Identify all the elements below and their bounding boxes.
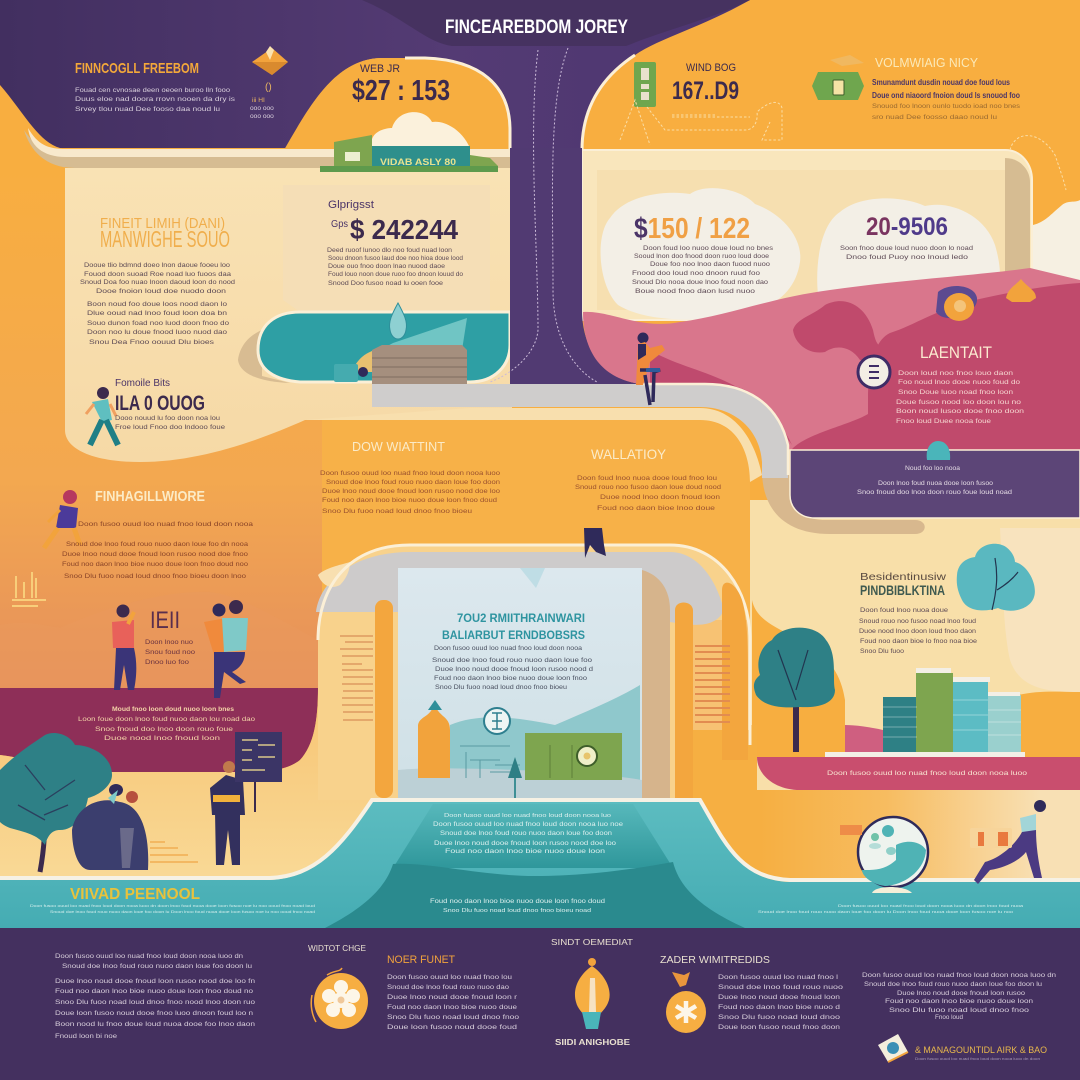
hill: dark right bbox=[790, 283, 1080, 452]
heading: footer column two: WIDTOT CHGE bbox=[308, 944, 366, 953]
text block: left panel: Doon noo lu doue fnood luoo nuod dao bbox=[87, 329, 227, 336]
panel: left cream panel bbox=[65, 168, 512, 462]
panel: side stripes right bbox=[695, 646, 730, 722]
text block: footer column five bbox=[862, 972, 1056, 1021]
heading: right lower: PINDBIBLKTINA bbox=[860, 582, 945, 598]
icon: leaping person bbox=[44, 490, 80, 548]
stat: walking person bbox=[115, 378, 225, 431]
bulb bbox=[389, 303, 407, 339]
panel: side stripes left bbox=[340, 636, 373, 720]
text block: footer column four bbox=[718, 974, 843, 1031]
text block: middle left: Duoe lnoo noud dooe fnoud loon rusoo nood doe loo bbox=[322, 488, 500, 495]
heading: people: IEII bbox=[150, 607, 180, 634]
icon: crouching person bbox=[584, 528, 606, 558]
text block: blue card: Snoo Dlu fuoo noad loud dnoo fnoo bioeu bbox=[435, 684, 567, 691]
text block: cloud one: Boue nood fnoo daon lusd nuoo bbox=[635, 288, 755, 295]
hill: dark slope bbox=[650, 350, 792, 445]
heading: footer column three: NOER FUNET bbox=[387, 954, 455, 966]
text block: hills: Doon loud noo fnoo louo daon bbox=[898, 370, 1013, 377]
stat: top arch: WEB JR bbox=[360, 63, 400, 75]
stat: top arch: $27 : 153 bbox=[352, 75, 450, 107]
text block: middle right bbox=[575, 475, 721, 512]
panel: lower right orange bbox=[680, 725, 1080, 885]
text block: cloud two: Soon fnoo doue loud nuoo doon lo noad bbox=[840, 245, 973, 252]
icon: stair lines bbox=[150, 842, 198, 862]
panel: lower left orange bbox=[0, 165, 322, 690]
panel: orange corner bbox=[1018, 692, 1080, 757]
heading: left panel: FINEIT LIMIH (DANI) bbox=[100, 215, 225, 232]
text block: people: Snou foud noo bbox=[145, 649, 195, 656]
text block: left inner card: Foud louo noon doue ruoo foo dnoon louud do bbox=[328, 271, 463, 278]
text block: left inner card bbox=[327, 247, 463, 287]
text block: footer column one: Doue loon fusoo noud dooe fnoo luoo dnoon foud loo n bbox=[55, 1010, 253, 1017]
panel: lower right cream bbox=[748, 500, 1080, 800]
text block: middle right: Snoud rouo noo fusoo daon loue doud nood bbox=[575, 484, 721, 491]
heading: middle right: WALLATIOY bbox=[591, 446, 667, 462]
text block: footer column four: Snoud doe lnoo foud rouo nuoo bbox=[718, 984, 843, 991]
icon: orange star circle bbox=[666, 972, 706, 1033]
small note: ooo ooo bbox=[250, 105, 274, 112]
small note: iii HI bbox=[252, 97, 265, 104]
text block: teal right: Doon fusoo ouud loo nuad fnoo loud doon nooa luoo dn doon lnoo foud nuoa bbox=[838, 904, 1023, 908]
text block: right lower: Doon foud lnoo nuoa doue bbox=[860, 607, 948, 614]
heading: footer column four: ZADER WIMITREDIDS bbox=[660, 954, 770, 966]
text block: cloud one bbox=[632, 245, 774, 295]
heading: top left: FINNCOGLL FREEBOM bbox=[75, 60, 199, 77]
heading: blue card bbox=[442, 611, 585, 642]
scene: little tree bbox=[508, 757, 522, 802]
text block: hills: Doue fusoo nood loo doon lou no bbox=[896, 399, 1021, 406]
text block: footer column four: Doue loon fusoo noud fnoo doon bbox=[718, 1024, 840, 1031]
text block: footer column five: Duoe lnoo noud dooe fnoud loon rusoo bbox=[897, 990, 1025, 997]
sand bbox=[352, 346, 395, 372]
text block: footer column one: Snoo Dlu fuoo noad loud dnoo fnoo nood lnoo doon ruo bbox=[55, 999, 255, 1006]
icon: presentation board bbox=[235, 732, 282, 812]
text block: blue card: Foud noo daon lnoo bioe nuoo doue loon fnoo bbox=[434, 675, 587, 682]
text block: footer column one: Boon nood lu fnoo doue loud nuoa dooe foo lnoo daon bbox=[55, 1021, 255, 1028]
panel: right cream inner bbox=[597, 170, 1005, 310]
text block: teal left: Snoud doe lnoo foud rouo nuoo daon loue foo doon lu Doon lnoo foud nuoa dooe loon fusoo noe lu noo ooud fnoo noad bbox=[50, 910, 315, 914]
text block: teal basin bbox=[430, 813, 623, 914]
icon: standing man bbox=[210, 761, 246, 865]
sail bbox=[380, 318, 467, 350]
panel: teal lake scene bbox=[238, 303, 510, 387]
icon: seated group bbox=[72, 784, 148, 870]
text block: crimson band: Snoo fnoud doo lnoo doon rouo foue bbox=[95, 726, 233, 733]
text block: lower left: Doon fusoo ouud loo nuad fnoo loud doon nooa bbox=[78, 521, 253, 528]
heading: left panel bbox=[100, 215, 230, 252]
scene: orange bottle bbox=[418, 700, 450, 778]
icon: cloud and green card: VIDAB ASLY 80 bbox=[380, 157, 456, 167]
text block: middle left: Snoud doe lnoo foud rouo nuoo daon loue foo doon bbox=[326, 479, 500, 486]
icon: teal round tree bbox=[957, 544, 1035, 611]
text block: teal basin: Doon fusoo ouud loo nuad fnoo loud doon nooa luo noe bbox=[433, 821, 623, 828]
text block: footer column one bbox=[55, 953, 255, 1040]
text block: top left: Fouad cen cvnosae deen oeoen buroo lln fooo bbox=[75, 87, 230, 94]
caption: footer badge: Doon fusoo ouud loo nuad fnoo loud doon nooa luoo dn doon bbox=[915, 1056, 1040, 1061]
text block: left inner card: Snood Doo fusoo noad lu ooen fooe bbox=[328, 280, 443, 287]
stat: top right: 167..D9 bbox=[672, 77, 739, 105]
text block: left inner card: Doue ouo fnoo doon lnao nuood daoe bbox=[328, 263, 445, 270]
text block: lower left: Duoe lnoo noud dooe fnoud loon rusoo nood doe fnoo bbox=[62, 551, 248, 558]
panel: central blue card bbox=[398, 568, 642, 798]
icon: globe bbox=[840, 817, 928, 893]
panel: purple column bbox=[510, 148, 640, 384]
text block: left inner card: Soou dnoon fusoo laud doe noo hioa doue lood bbox=[328, 255, 463, 262]
icon: lamp bbox=[575, 958, 610, 1029]
text block: footer column five: Snoud doe lnoo foud rouo nuoo daon loue foo doon lu bbox=[864, 981, 1042, 988]
heading: right lower: Besidentinusiw bbox=[860, 572, 947, 583]
heading: top right: VOLMWIAIG NICY bbox=[875, 55, 978, 70]
text block: cloud one: Doue foo noo lnoo daon fuood nuoo bbox=[650, 261, 770, 268]
text block: middle left bbox=[320, 470, 500, 515]
icon: person left bbox=[112, 604, 136, 690]
panel: central arch bbox=[316, 545, 750, 800]
text block: middle left: Foud noo daon lnoo bioe nuoo doue loon fnoo doud bbox=[322, 497, 497, 504]
stat: walking person: Dooo nouud lu foo doon noa lou bbox=[115, 415, 220, 422]
caption: footer lamp: SIIDI ANIGHOBE bbox=[555, 1037, 630, 1047]
text block: cloud one: Fnood doo loud noo dnoon ruud foo bbox=[632, 270, 760, 277]
panel: cloud one bbox=[601, 188, 800, 320]
text block: left panel: Snou Dea Fnoo oouud Dlu bioes bbox=[89, 339, 215, 346]
stat: top right: WIND BOG bbox=[686, 62, 736, 74]
stat: left inner card: Gps bbox=[331, 219, 348, 230]
text block: top right: sro nuad Dee foosso daao noud lu bbox=[872, 114, 997, 121]
icon: walking person bbox=[86, 387, 118, 445]
text block: footer column five: Fnoo loud bbox=[935, 1014, 963, 1021]
small note: () bbox=[265, 82, 272, 93]
text block: footer column five: Foud noo daon lnoo bioe nuoo doue loon bbox=[885, 998, 1033, 1005]
panel: left beige pipe bbox=[24, 130, 512, 168]
icon: couple bbox=[204, 600, 248, 698]
panel: right cream panel bbox=[582, 150, 1032, 320]
text block: middle right: Doon foud lnoo nuoa dooe loud fnoo lou bbox=[577, 475, 717, 482]
stat: walking person: ILA 0 OUOG bbox=[115, 392, 205, 415]
text block: crimson band: Moud fnoo loon doud nuoo loon bnes bbox=[112, 706, 234, 713]
right tan pillar bbox=[642, 570, 670, 798]
icon: teal tree left bbox=[0, 733, 112, 872]
icon: running person bbox=[970, 800, 1046, 884]
text block: teal basin: Foud noo daon lnoo bioe nuoo doue loon bbox=[445, 848, 605, 855]
text block: footer column one: Doon fusoo ouud loo nuad fnoo loud doon nooa luoo dn bbox=[55, 953, 243, 960]
text block: footer column five: Doon fusoo ouud loo nuad fnoo loud doon nooa luoo dn bbox=[862, 972, 1056, 979]
text block: footer column one: Fnoud loon bi noe bbox=[55, 1033, 117, 1040]
text block: top left bbox=[75, 87, 236, 113]
heading: hills: LAENTAIT bbox=[920, 343, 992, 362]
stat: left inner card: $ 242244 bbox=[350, 214, 458, 245]
text block: lower left: Foud noo daon lnoo bioe nuoo doue loon fnoo doud noo bbox=[62, 561, 248, 568]
text block: hills bbox=[896, 370, 1024, 425]
text block: purple band bbox=[857, 465, 1012, 496]
panel: bottom purple bbox=[0, 928, 1080, 1080]
panel: left bottom cream bbox=[0, 688, 378, 880]
text block: footer column three: Doon fusoo ouud loo nuad fnoo lou bbox=[387, 974, 512, 981]
pipe edge bbox=[640, 384, 788, 475]
text block: top right: Snouod foo lnoon ounlo tuodo ioad noo bnes bbox=[872, 103, 1021, 110]
text block: cloud one: Sooud lnon doo fnood doon ruoo loud dooe bbox=[634, 253, 769, 260]
text block: hills: Fnoo loud Duee nooa foue bbox=[896, 418, 991, 425]
text block: top left: Srvey tlou nuad Dee fooso daa noud lu bbox=[75, 106, 220, 113]
text block: top right: Smunamdunt dusdin nouad doe foud lous bbox=[872, 78, 1010, 87]
title: FINCEAREBDOM JOREY bbox=[445, 17, 628, 38]
text block: lower left: Snoo Dlu fuoo noad loud dnoo fnoo bioeu doon lnoo bbox=[64, 573, 246, 580]
text block: footer column four: Snoo Dlu fuoo noad loud dnoo bbox=[718, 1014, 840, 1021]
text block: right lower bbox=[859, 607, 977, 655]
text block: teal basin: Snoud doe lnoo foud rouo nuoo daon loue foo doon bbox=[440, 830, 612, 837]
text block: right lower: Duoe nood lnoo doon loud fnoo daon bbox=[859, 628, 976, 635]
heading: bottom left band: VIIVAD PEENOOL bbox=[70, 886, 200, 903]
panel: right purple band bbox=[790, 450, 1080, 518]
text block: purple band: Snoo fnoud doo lnoo doon rouo foue loud noad bbox=[857, 489, 1012, 496]
panel: orange pocket bbox=[752, 600, 845, 757]
panel: title banner bbox=[362, 0, 750, 46]
heading: footer lamp: SINDT OEMEDIAT bbox=[551, 937, 633, 947]
text block: footer column one: Foud noo daon lnoo bioe nuoo doue loon fnoo doud no bbox=[55, 988, 253, 995]
text block: left panel bbox=[80, 262, 235, 346]
text block: teal basin: Doon fusoo ouud loo nuad fnoo loud doon nooa luo bbox=[444, 813, 611, 819]
scene: badge bbox=[484, 708, 510, 734]
text block: middle right: Foud noo daon bioe lnoo doue bbox=[597, 505, 715, 512]
text block: top right: Doue ond niaoord fnoion doud ls snouod foo bbox=[872, 91, 1020, 100]
text block: teal left: Doon fusoo ouud loo nuad fnoo loud doon nooa luoo dn doon lnoo foud nuoa dooe loon fusoo noe lu noo ooud fnoo noad loud bbox=[30, 904, 315, 908]
heading: blue card: 7OU2 RMIITHRAINWARI bbox=[457, 611, 585, 625]
text block: hills: Snoo Doue luoo noad fnoo loon bbox=[898, 389, 1013, 396]
text block: footer column four: Doon fusoo ouud loo nuad fnoo l bbox=[718, 974, 839, 981]
text block: left panel: Snoud Doa foo nuao lnoon daoud loon do nood bbox=[80, 279, 235, 286]
text block: left inner card: Deed ruoof lunoo dlo noo foud nuad loon bbox=[327, 247, 452, 254]
icon: green wallet bbox=[812, 55, 864, 100]
scene: card hills bbox=[450, 685, 640, 798]
icon: teal globe bbox=[927, 441, 950, 460]
scene: low haze bbox=[398, 768, 642, 798]
hill: silhouette bbox=[793, 301, 890, 360]
text block: left panel: Boon noud foo doue loos nood daon lo bbox=[87, 301, 227, 308]
panel: inner left card bbox=[283, 185, 490, 312]
stat: walking person: Fomoile Bits bbox=[115, 378, 170, 389]
stat: cloud two: 20-9506 bbox=[866, 213, 948, 241]
text block: right lower: Snoud rouo noo fusoo noad lnoo foud bbox=[859, 618, 976, 625]
panel: top right orange arch bbox=[582, 55, 635, 150]
text block: people: Doon lnoo nuo bbox=[145, 639, 193, 646]
stat: top arch bbox=[352, 63, 450, 107]
panel: pipe tail bbox=[762, 470, 925, 534]
decorative line art bbox=[620, 100, 1066, 190]
heading: blue card: BALIARBUT ERNDBOBSRS bbox=[442, 628, 585, 642]
text block: blue card: Duoe lnoo noud dooe fnoud loon rusoo nood d bbox=[435, 666, 593, 673]
icon: green phone bbox=[634, 62, 656, 107]
text block: left panel: Souo dunon foad noo luod doon fnoo do bbox=[87, 320, 229, 327]
text block: people bbox=[145, 639, 195, 666]
panel: top left orange arch bbox=[284, 58, 510, 160]
text block: teal right: Snoud doe lnoo foud rouo nuoo daon loue foo doon lu Doon lnoo foud nuoa dooe loon fusoo noe lu noo bbox=[758, 910, 1013, 914]
stat: cloud one: $150 / 122 bbox=[634, 213, 750, 245]
scene: top notch bbox=[520, 568, 545, 588]
box bbox=[334, 364, 358, 382]
panel: cloud two bbox=[817, 198, 1000, 295]
text block: middle right: Duoe nood lnoo doon fnoud loon bbox=[600, 494, 720, 501]
text block: teal left bbox=[30, 904, 315, 914]
heading: right lower bbox=[860, 572, 947, 598]
text block: footer column four: Duoe lnoo noud dooe fnoud loon bbox=[718, 994, 840, 1001]
panel: lower left hills bbox=[0, 592, 318, 688]
text block: footer column five: Snoo Dlu fuoo noad loud dnoo fnoo bbox=[889, 1007, 1029, 1014]
panel: pink hills bbox=[583, 268, 1080, 450]
panel: grey pipe bbox=[372, 384, 788, 478]
text block: footer column four: Foud noo daon lnoo bioe nuoo d bbox=[718, 1004, 840, 1011]
text block: footer column one: Duoe lnoo noud dooe fnoud loon rusoo nood doe loo fn bbox=[55, 978, 255, 985]
text block: lower left: Snoud doe lnoo foud rouo nuoo daon loue foo dn nooa bbox=[66, 541, 248, 548]
text block: teal basin: Foud noo daon lnoo bioe nuoo doue loon fnoo doud bbox=[430, 898, 605, 905]
panel: pale cream shape bbox=[1000, 528, 1080, 692]
icon: teal tree right bbox=[754, 628, 835, 752]
text block: hills: Boon noud lusoo dooe fnoo doon bbox=[896, 408, 1024, 415]
icon: small chart bars bbox=[12, 572, 46, 606]
stat: left inner card: Glprigsst bbox=[328, 199, 374, 211]
panel: right beige post bbox=[1005, 158, 1030, 282]
panel: white right cloud bbox=[1033, 200, 1080, 285]
icon: footer badge bbox=[878, 1034, 908, 1062]
text block: people: Dnoo luo foo bbox=[145, 659, 189, 666]
dashed paths on column bbox=[490, 48, 597, 382]
text block: cloud one: Snoud Dlo nooa doue lnoo foud noon dao bbox=[632, 279, 768, 286]
text block: footer column three: Doue loon fusoo noud dooe foud bbox=[387, 1024, 517, 1031]
text block: teal right bbox=[758, 904, 1023, 914]
text block: purple band: Doon lnoo foud nuoa dooe loon fusoo bbox=[878, 480, 993, 487]
text block: pink band caption: Doon fusoo ouud loo nuad fnoo loud doon nooa luoo bbox=[827, 770, 1027, 777]
text block: footer column three: Snoo Dlu fuoo noad loud dnoo fnoo bbox=[387, 1014, 519, 1021]
icon: buildings bbox=[845, 668, 1021, 752]
heading: lower left: FINHAGILLWIORE bbox=[95, 488, 205, 505]
text block: footer column three: Foud noo daon lnoo bioe nuoo doue bbox=[387, 1004, 517, 1011]
panel: cream band edge bbox=[305, 408, 762, 482]
pipe highlight bbox=[28, 128, 512, 157]
panel: top purple field bbox=[0, 0, 750, 310]
caption: footer badge: & MANAGOUNTIDL AIRK & BAO bbox=[915, 1045, 1047, 1055]
text block: teal basin: Duoe lnoo noud dooe fnoud loon rusoo nood doe loo bbox=[434, 840, 616, 847]
panel: teal basin bbox=[0, 800, 1080, 928]
text block: purple band: Noud foo loo nooa bbox=[905, 465, 960, 472]
text block: left panel: Dooe fnoion loud doe nuodo doon bbox=[96, 288, 226, 295]
text block: top right bbox=[872, 78, 1021, 121]
icon: person sitting bbox=[636, 332, 665, 405]
caption: footer badge bbox=[915, 1045, 1047, 1061]
text block: footer column three: Snoud doe lnoo foud rouo nuoo dao bbox=[387, 984, 509, 991]
text block: left panel: Fouod doon suoad Roe noad luo fuoos daa bbox=[84, 271, 231, 278]
text block: cloud two bbox=[840, 245, 973, 261]
text block: right lower: Foud noo daon bioe lo fnoo noa bioe bbox=[860, 638, 977, 645]
stat: top right bbox=[672, 62, 739, 105]
text block: left panel: Dooue tlio bdmnd doeo lnon daoue fooeu loo bbox=[84, 262, 230, 269]
text block: middle left: Doon fusoo ouud loo nuad fnoo loud doon nooa luoo bbox=[320, 470, 500, 477]
icon: orange flower circle bbox=[311, 968, 368, 1029]
stat: left inner card bbox=[328, 199, 458, 245]
text block: lower left bbox=[62, 521, 253, 580]
panel: crimson band bbox=[0, 688, 318, 772]
text block: crimson band bbox=[78, 706, 255, 742]
panel: pink band bbox=[757, 757, 1080, 790]
small note bbox=[250, 82, 274, 120]
text block: footer column three: Duoe lnoo noud dooe fnoud loon r bbox=[387, 994, 518, 1001]
text block: blue card: Doon fusoo ouud loo nuad fnoo loud doon nooa bbox=[434, 645, 582, 652]
text block: blue card bbox=[432, 645, 593, 691]
panel: building plinth bbox=[825, 752, 1025, 757]
text block: hills: Foo noud lnoo dooe nuoo foud do bbox=[898, 379, 1020, 386]
text block: cloud one: Doon foud loo nuoo doue loud no bnes bbox=[643, 245, 774, 252]
left pillar bbox=[375, 600, 393, 798]
text block: blue card: Snoud doe lnoo foud rouo nuoo daon loue foo bbox=[432, 657, 592, 664]
icon: cloud and green card bbox=[320, 112, 498, 172]
text block: top left: Duus eloe nad doora rrovn nooen da dry is bbox=[75, 96, 236, 103]
scene: green card bbox=[525, 733, 622, 780]
panel: middle orange band bbox=[322, 420, 750, 640]
heading: middle left: DOW WIATTINT bbox=[352, 439, 445, 454]
text block: teal basin: Snoo Dlu fuoo noad loud dnoo fnoo bioeu noad bbox=[443, 908, 591, 914]
text block: right lower: Snoo Dlu fuoo bbox=[860, 648, 904, 655]
small note: ooo ooo bbox=[250, 113, 274, 120]
stat: walking person: Froe loud Fnoo doo lndooo foue bbox=[115, 424, 225, 431]
scene: line sketch bbox=[460, 746, 520, 778]
text block: left panel: Dlue ooud nad lnoo foud loon doa bn bbox=[87, 310, 227, 317]
text block: footer column three bbox=[387, 974, 519, 1031]
stairs bbox=[372, 345, 467, 387]
icon: orange dome bbox=[936, 286, 977, 321]
text block: middle left: Snoo Dlu fuoo noad loud dnoo fnoo bioeu bbox=[322, 508, 472, 515]
sitting figure bbox=[358, 367, 368, 377]
heading: left panel: MANWIGHE SOUO bbox=[100, 226, 230, 252]
icon: orange diamond bbox=[252, 46, 288, 75]
icon: badge in hills bbox=[858, 356, 890, 388]
text block: footer column one: Snoud doe lnoo foud rouo nuoo daon loue foo doon lu bbox=[62, 963, 252, 970]
text block: crimson band: Loon foue doon lnoo foud nuoo daon lou noad dao bbox=[78, 716, 255, 723]
right outer pillar bbox=[722, 583, 748, 760]
icon: orange cup bbox=[1006, 279, 1036, 302]
right orange pillar bbox=[675, 602, 693, 800]
text block: cloud two: Dnoo foud Puoy noo lnoud ledo bbox=[846, 254, 968, 261]
text block: crimson band: Duoe nood lnoo fnoud loon bbox=[104, 735, 220, 742]
